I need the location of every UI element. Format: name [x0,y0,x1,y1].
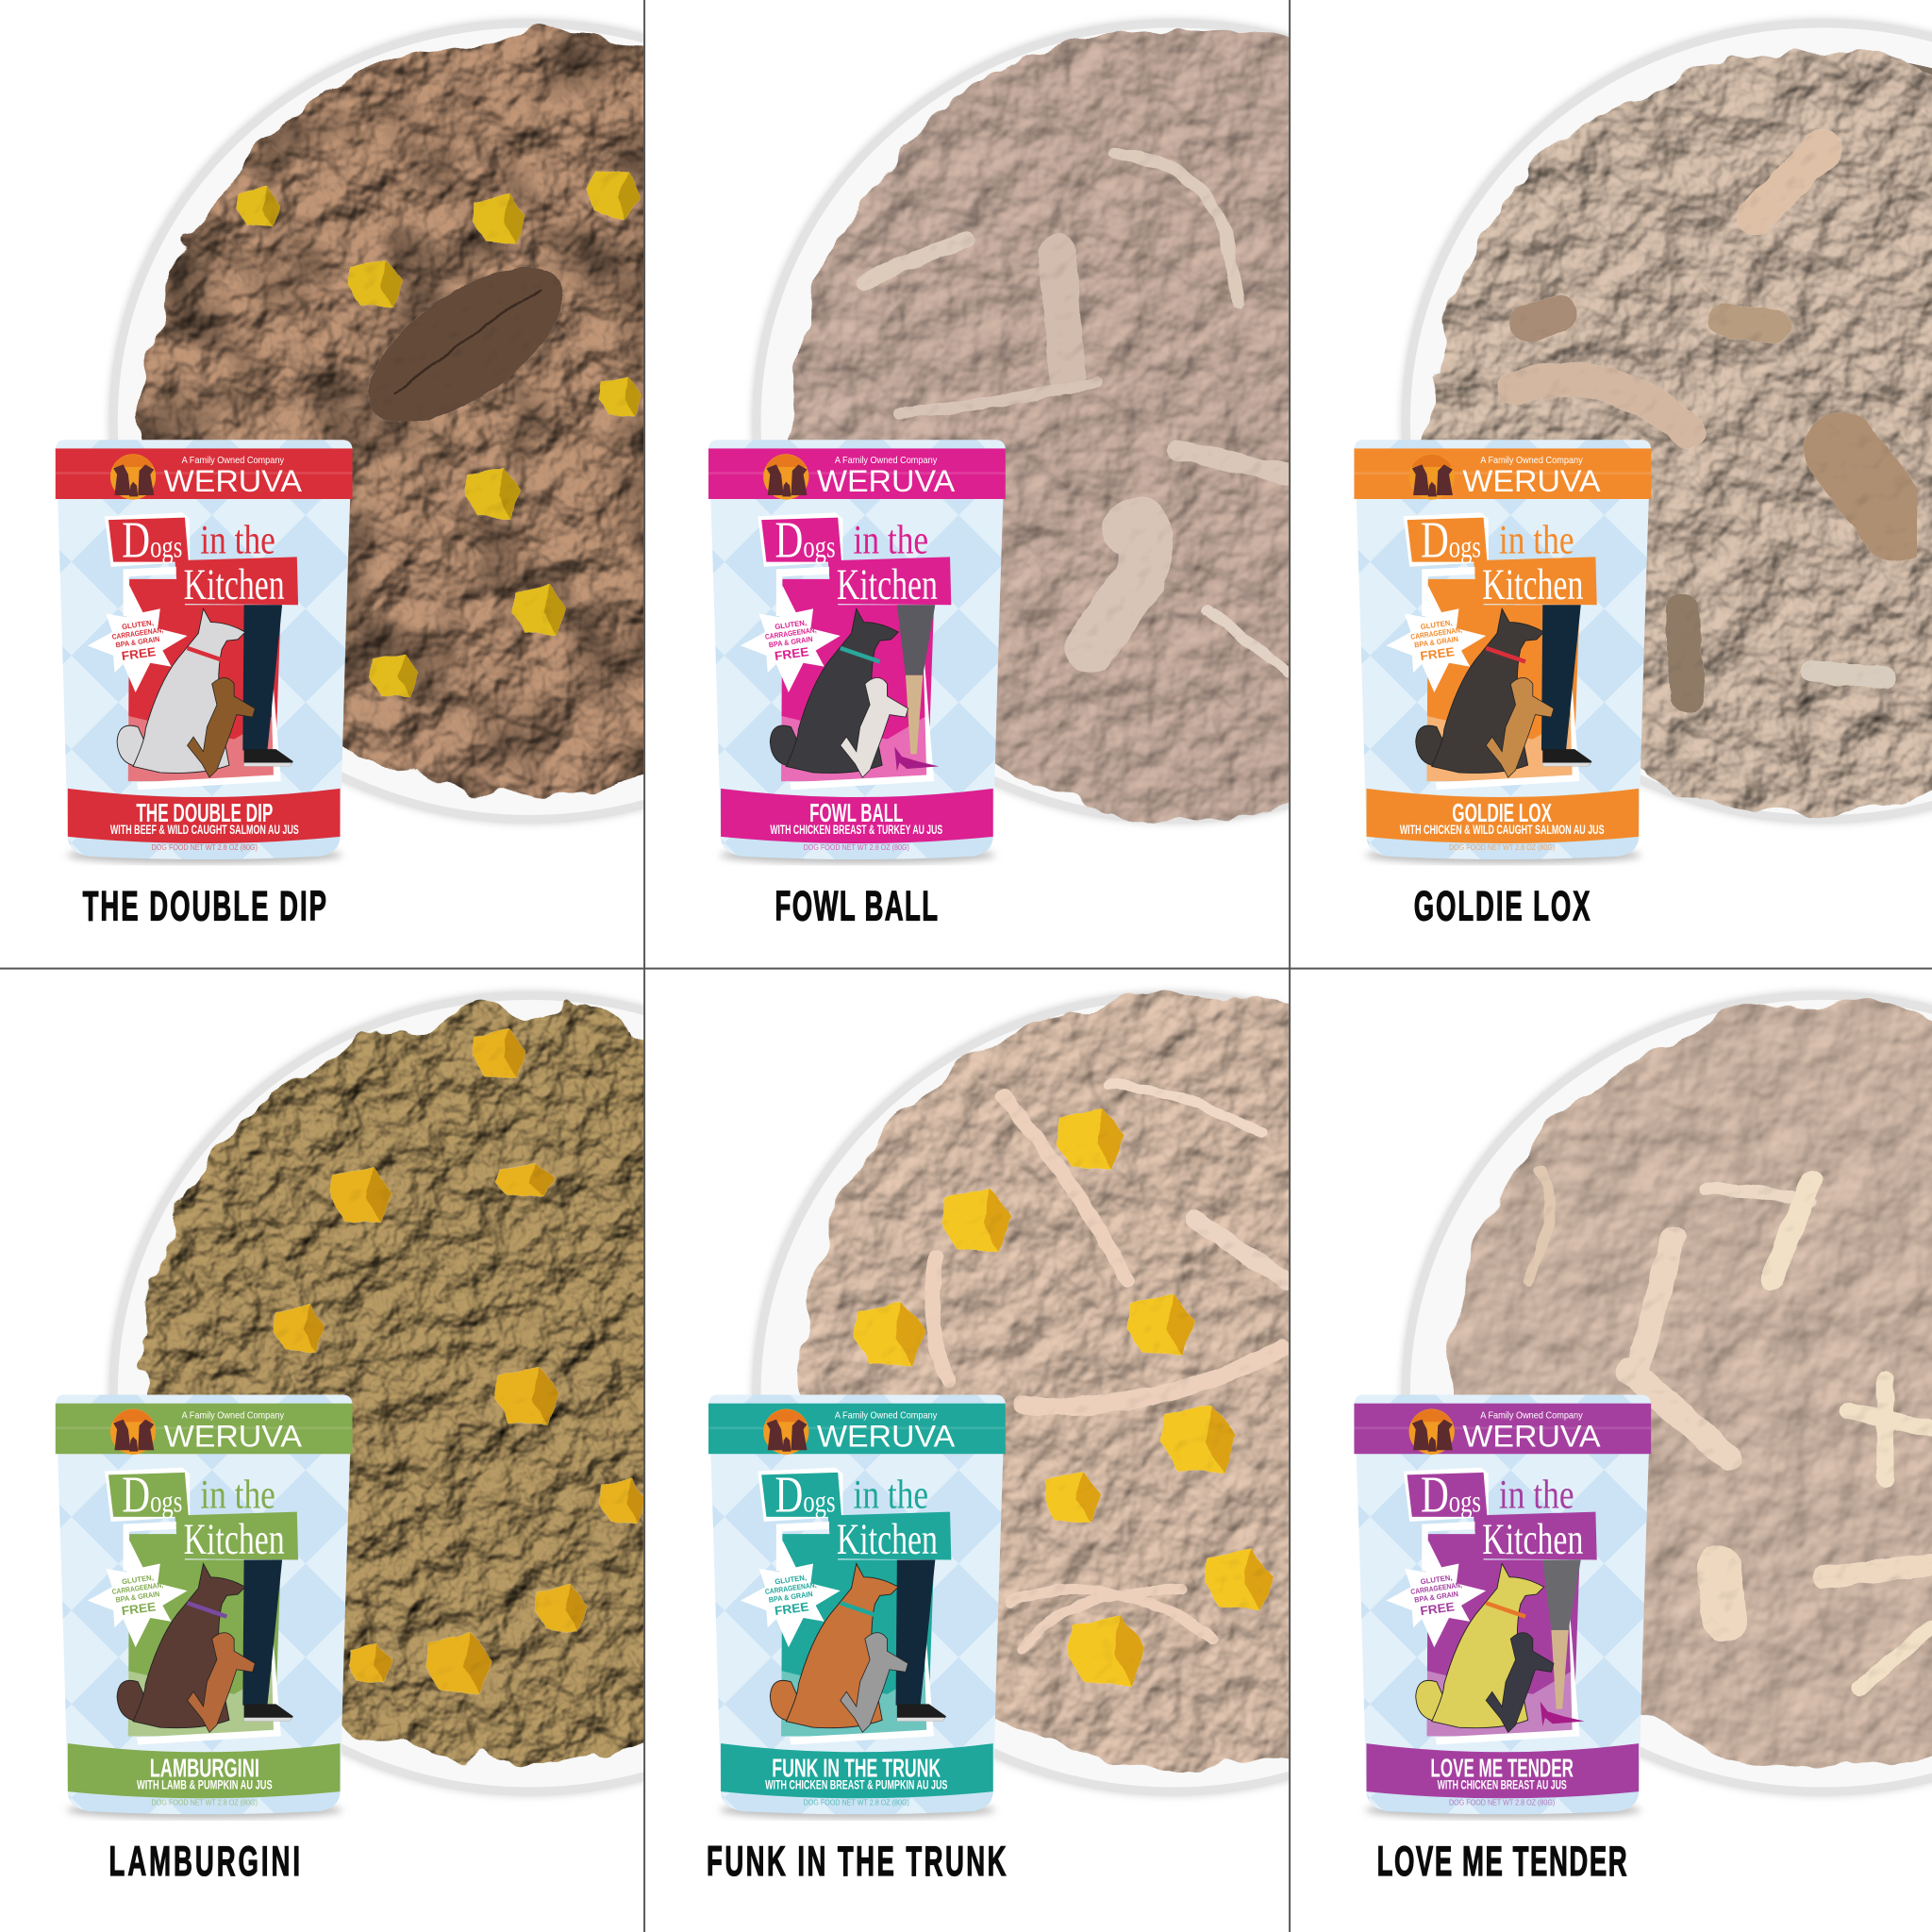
pouch: lamburgini: FREE [121,1599,157,1618]
pouch: goldie lox: GLUTEN, [1420,619,1453,631]
pouch: the double dip: DOG FOOD NET WT 2.8 OZ (80G) [152,843,258,852]
pouch: the double dip: Kitchen [184,560,285,609]
chicken shreds [932,1084,1288,1651]
panel: funk in the trunk [707,991,1594,1885]
pouch: love me tender: A Family Owned Company [1480,1410,1583,1421]
pouch: funk in the trunk [708,1395,1006,1819]
pouch: lamburgini: Dogs [122,1466,182,1524]
pouch: love me tender: Dogs [1421,1466,1481,1524]
yellow pumpkin chunks [274,1029,646,1694]
pouch: fowl ball: WITH CHICKEN BREAST & TURKEY AU JUS [770,823,942,837]
label: fowl ball: FOWL BALL [775,883,938,929]
pouch: funk in the trunk: BPA & GRAIN [768,1590,813,1605]
pouch: lamburgini: BPA & GRAIN [115,1590,160,1605]
yellow pumpkin chunks [855,1109,1273,1687]
pouch: funk in the trunk: FREE [774,1599,810,1618]
pouch: funk in the trunk: Kitchen [837,1515,938,1564]
pouch: funk in the trunk: CARRAGEENAN, [764,1580,817,1596]
pouch: fowl ball: in the [853,518,928,562]
pouch: fowl ball: BPA & GRAIN [768,635,813,649]
pouch: goldie lox: in the [1499,518,1574,562]
pouch: lamburgini: CARRAGEENAN, [111,1580,164,1596]
pouch: fowl ball: CARRAGEENAN, [764,625,817,641]
pouch: lamburgini: WITH LAMB & PUMPKIN AU JUS [137,1777,273,1791]
pouch: fowl ball: GLUTEN, [774,619,808,631]
pouch: the double dip: WERUVA [164,463,302,498]
label: goldie lox: GOLDIE LOX [1414,883,1591,929]
pouch: goldie lox: WITH CHICKEN & WILD CAUGHT SALMON AU JUS [1400,823,1605,837]
pouch: goldie lox [1354,440,1651,864]
pouch: fowl ball: Kitchen [837,560,938,609]
pouch: funk in the trunk: WITH CHICKEN BREAST & PUMPKIN AU JUS [765,1777,947,1791]
panel: fowl ball [708,15,1289,922]
pouch: love me tender [1354,1395,1651,1819]
pouch: lamburgini: A Family Owned Company [182,1410,284,1421]
pouch: lamburgini: LAMBURGINI [150,1753,259,1782]
pouch: the double dip: FREE [121,644,157,663]
chicken shreds [862,154,1288,672]
pouch: goldie lox: CARRAGEENAN, [1410,625,1462,641]
pouch: goldie lox: BPA & GRAIN [1414,635,1459,649]
pouch: love me tender: Kitchen [1482,1515,1583,1564]
pouch: lamburgini: WERUVA [164,1418,302,1453]
pouch: love me tender: FREE [1419,1599,1456,1618]
pouch: the double dip: in the [200,518,275,562]
pouch: funk in the trunk: Dogs [775,1466,836,1524]
pouch: fowl ball: Dogs [775,510,836,568]
pouch: fowl ball: WERUVA [817,463,955,498]
pouch: love me tender: LOVE ME TENDER [1430,1753,1574,1782]
pouch: fowl ball: DOG FOOD NET WT 2.8 OZ (80G) [804,843,909,852]
bowl and food: goldie lox [1401,19,1932,824]
pouch: funk in the trunk: DOG FOOD NET WT 2.8 OZ (80G) [804,1798,909,1807]
pouch: lamburgini: Kitchen [184,1515,285,1564]
pouch: fowl ball: FOWL BALL [809,798,903,827]
yellow chunks [237,162,646,697]
pouch: funk in the trunk: GLUTEN, [774,1574,808,1586]
label: funk in the trunk: FUNK IN THE TRUNK [707,1838,1007,1885]
pouch: funk in the trunk: FUNK IN THE TRUNK [772,1753,941,1782]
pouch: fowl ball: FREE [774,644,810,663]
large brown meat piece [368,266,563,423]
pouch: the double dip: THE DOUBLE DIP [136,798,273,827]
bowl and food: funk in the trunk [752,991,1594,1796]
bowl and food: the double dip [106,15,643,827]
label: love me tender: LOVE ME TENDER [1377,1838,1627,1885]
pouch: the double dip: CARRAGEENAN, [111,625,164,641]
pouch: fowl ball: A Family Owned Company [835,456,937,466]
pouch: goldie lox: Kitchen [1482,560,1583,609]
pouch: the double dip: BPA & GRAIN [115,635,160,649]
pouch: the double dip [56,440,353,864]
pouch: love me tender: WERUVA [1462,1418,1601,1453]
label: lamburgini: LAMBURGINI [109,1838,300,1885]
pouch: funk in the trunk: in the [853,1474,928,1518]
pouch: the double dip: WITH BEEF & WILD CAUGHT SALMON AU JUS [110,823,299,837]
bowl and food: love me tender [1401,991,1932,1796]
pouch: goldie lox: WERUVA [1462,463,1601,498]
panel: the double dip [55,15,643,922]
pouch: love me tender: BPA & GRAIN [1414,1590,1459,1605]
bowl and food: lamburgini [108,991,951,1796]
pouch: lamburgini [56,1395,353,1819]
pouch: funk in the trunk: A Family Owned Company [835,1410,937,1421]
pouch: lamburgini: DOG FOOD NET WT 2.8 OZ (80G) [152,1798,258,1807]
chicken and salmon pieces [1516,148,1897,696]
panel: goldie lox [1354,19,1932,929]
pouch: love me tender: CARRAGEENAN, [1410,1580,1462,1596]
pouch: the double dip: Dogs [122,510,182,568]
pouch: goldie lox: A Family Owned Company [1480,456,1583,466]
pouch: the double dip: A Family Owned Company [182,456,284,466]
pouch: love me tender: GLUTEN, [1420,1574,1453,1586]
pouch: goldie lox: GOLDIE LOX [1452,798,1553,827]
pouch: love me tender: WITH CHICKEN BREAST AU JUS [1438,1777,1567,1791]
pouch: goldie lox: FREE [1419,644,1456,663]
pouch: lamburgini: GLUTEN, [121,1574,154,1586]
bowl and food: fowl ball [749,15,1289,827]
panel: lamburgini [56,991,951,1885]
pouch: goldie lox: DOG FOOD NET WT 2.8 OZ (80G) [1449,843,1556,852]
pouch: goldie lox: Dogs [1421,510,1481,568]
panel: love me tender [1354,991,1932,1885]
label: the double dip: THE DOUBLE DIP [83,883,326,929]
pouch: love me tender: DOG FOOD NET WT 2.8 OZ (80G) [1449,1798,1556,1807]
pouch: the double dip: GLUTEN, [121,619,154,631]
chicken tenders [1528,1171,1932,1688]
pouch: love me tender: in the [1499,1474,1574,1518]
pouch: funk in the trunk: WERUVA [817,1418,955,1453]
pouch: lamburgini: in the [200,1474,275,1518]
pouch: fowl ball [708,440,1006,864]
